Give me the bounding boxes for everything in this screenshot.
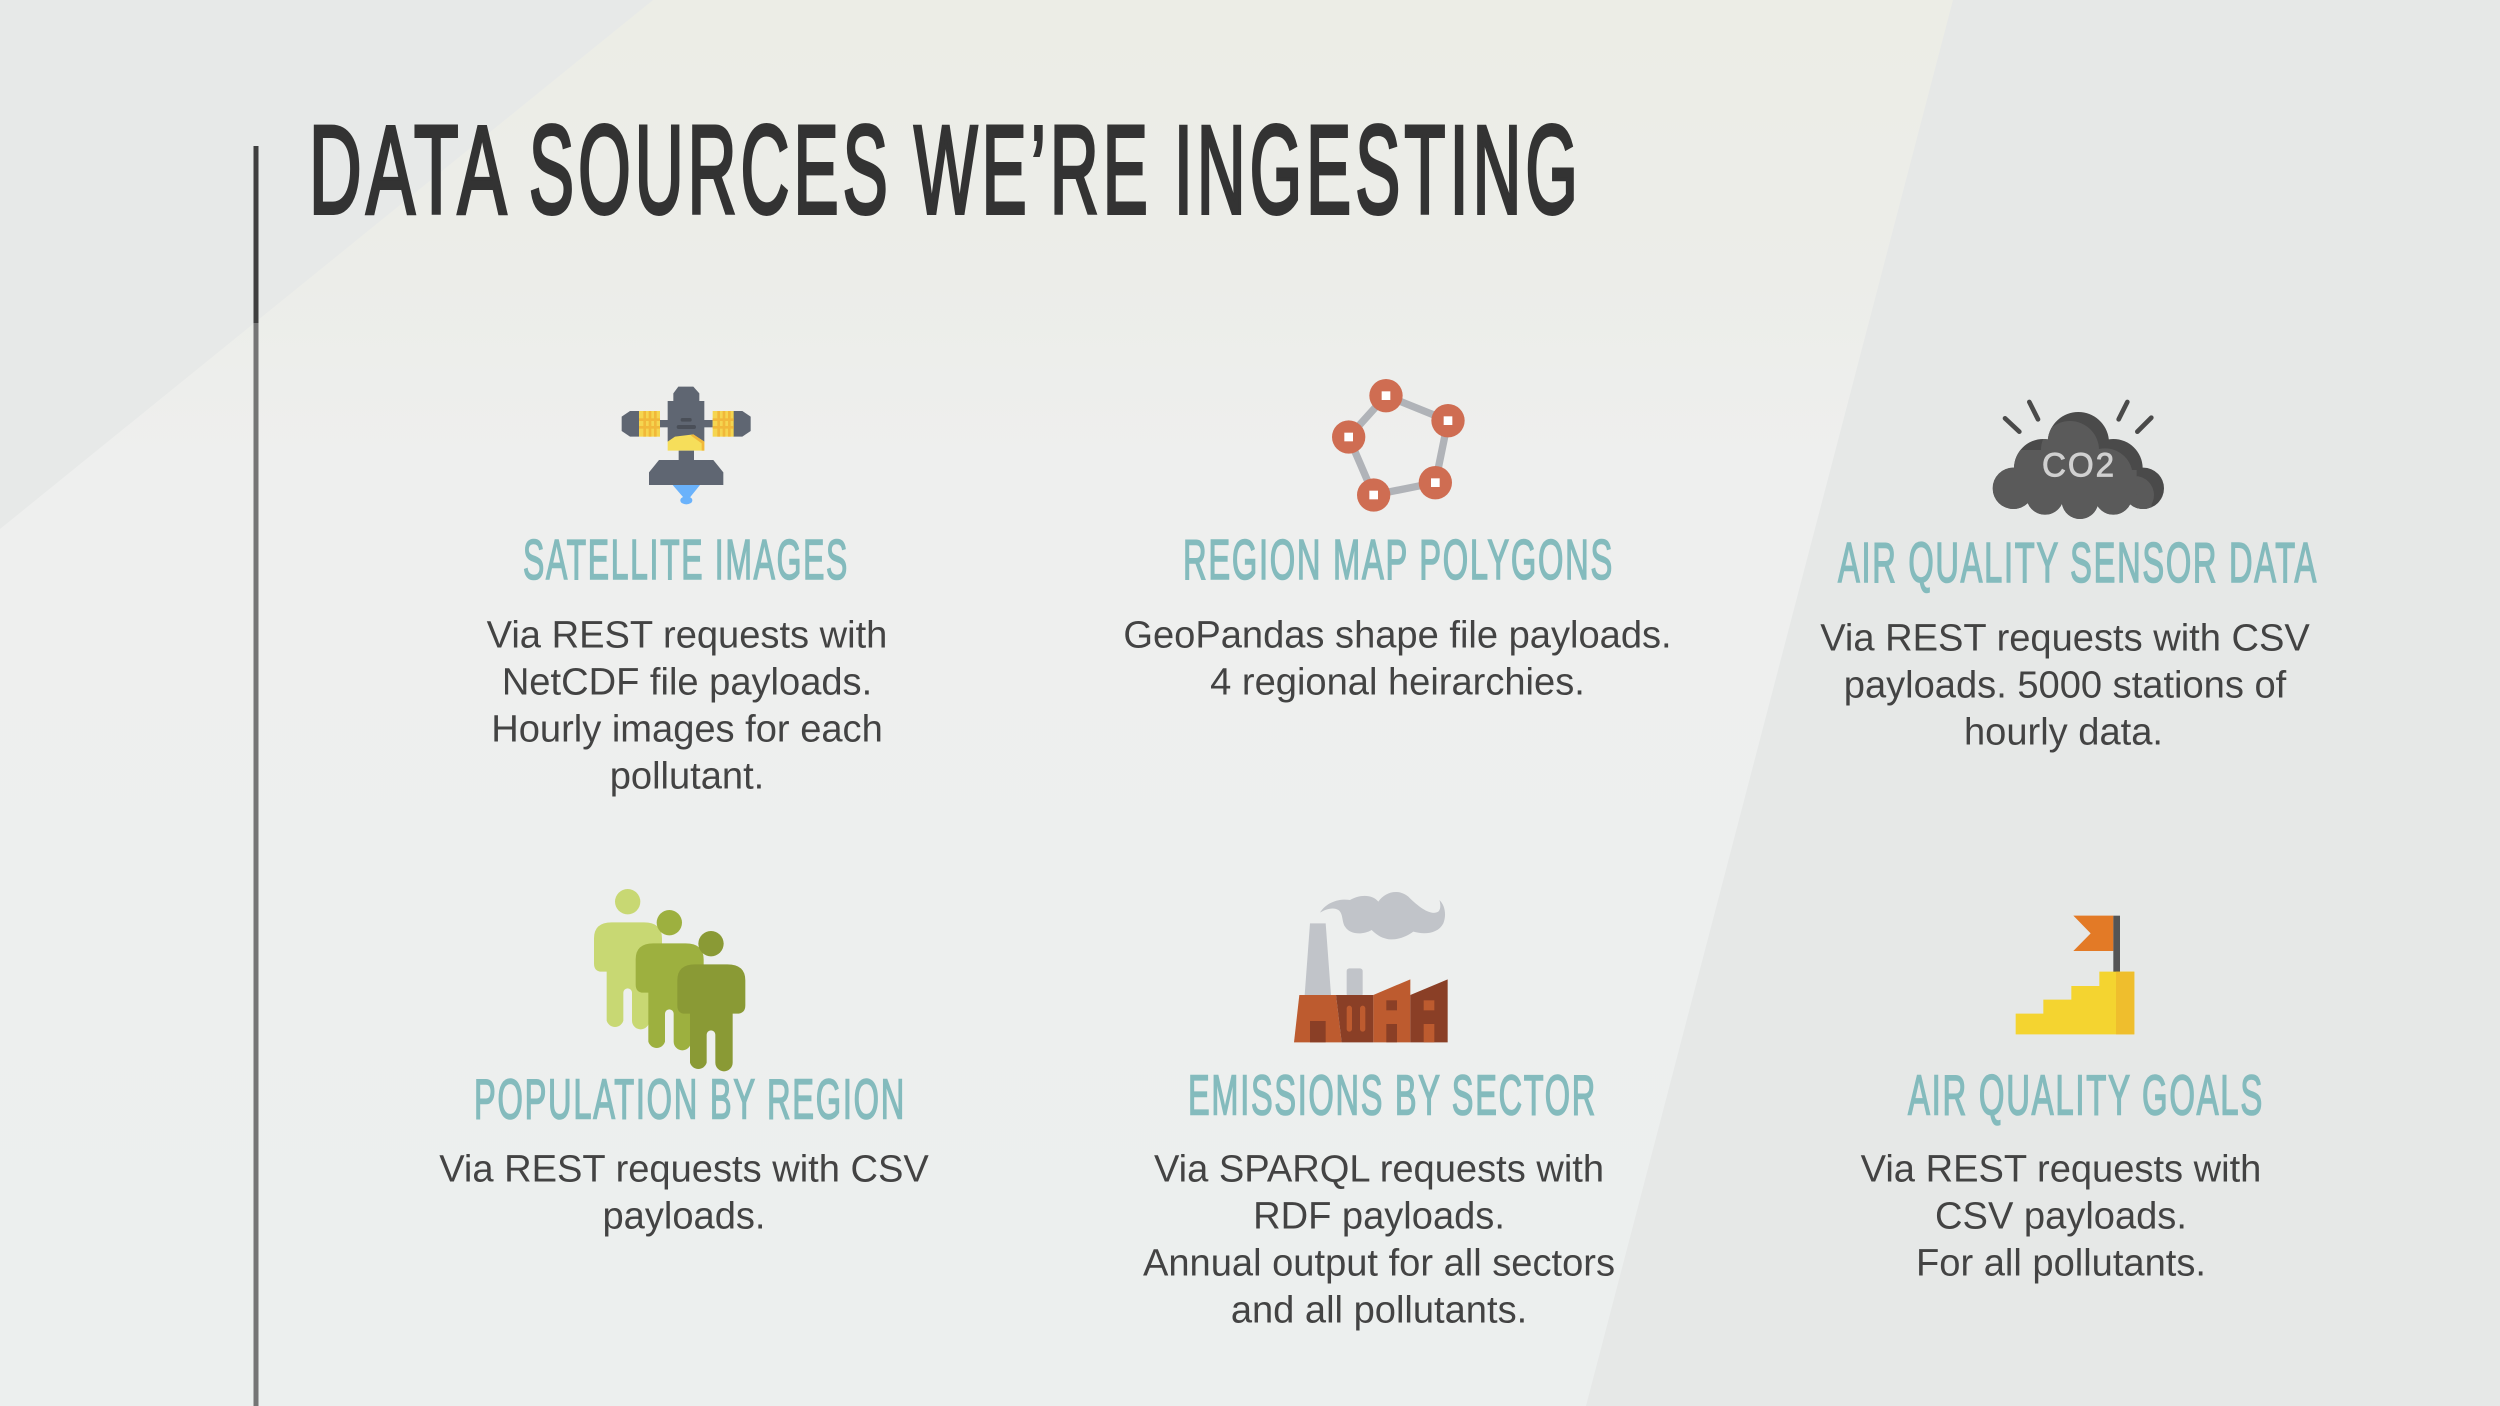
panel: population by region bbox=[439, 889, 929, 1238]
text: emissions description: and all pollutants. bbox=[1231, 1290, 1527, 1332]
heading: emissions by sector: EMISSIONS BY SECTOR bbox=[1188, 1064, 1597, 1128]
heading: region map polygons: REGION MAP POLYGONS bbox=[1183, 528, 1614, 592]
text: satellite images description: NetCDF file payloads. bbox=[502, 662, 872, 704]
text: satellite images description: Hourly images for each bbox=[491, 708, 883, 750]
title: WE’RE bbox=[914, 101, 1152, 240]
title: INGESTING bbox=[1174, 101, 1582, 240]
text: goals description: For all pollutants. bbox=[1916, 1242, 2206, 1284]
panel: emissions by sector bbox=[1143, 892, 1615, 1332]
text: emissions description: Via SPARQL requests with bbox=[1154, 1148, 1604, 1190]
text: sensor data description: payloads. 5000 stations of bbox=[1844, 664, 2287, 706]
text: goals description: Via REST requests with bbox=[1861, 1148, 2261, 1190]
title: DATA bbox=[309, 101, 507, 240]
panel: region map polygons bbox=[1123, 379, 1672, 704]
title: SOURCES bbox=[529, 101, 892, 240]
icon: three people bbox=[594, 889, 745, 1071]
heading: population by region: POPULATION BY REGION bbox=[474, 1068, 906, 1132]
text: goals description bbox=[1861, 1148, 2261, 1284]
text: population description: Via REST requests with CSV bbox=[439, 1148, 929, 1190]
icon: satellite bbox=[622, 387, 751, 504]
vertical accent line bbox=[254, 146, 258, 1406]
panel: satellite images bbox=[487, 387, 887, 798]
text: emissions description: Annual output for all sectors bbox=[1143, 1242, 1615, 1284]
text: emissions description bbox=[1143, 1148, 1615, 1332]
panel: air quality goals bbox=[1861, 916, 2264, 1284]
icon: flag on stairs bbox=[2016, 916, 2134, 1034]
text: region map description: 4 regional heirarchies. bbox=[1210, 662, 1585, 704]
text: goals description: CSV payloads. bbox=[1935, 1196, 2187, 1238]
text: sensor data description: hourly data. bbox=[1964, 712, 2163, 754]
text: sensor data description: Via REST requests with CSV bbox=[1820, 618, 2310, 660]
icon: CO2 cloud bbox=[1990, 402, 2167, 522]
text: sensor data description bbox=[1820, 618, 2310, 754]
text: emissions description: RDF payloads. bbox=[1253, 1196, 1505, 1238]
text: satellite images description bbox=[487, 614, 887, 798]
text: region map description bbox=[1123, 614, 1672, 704]
icon: factory bbox=[1294, 892, 1448, 1042]
text: population description: payloads. bbox=[602, 1196, 766, 1238]
panel: air quality sensor data bbox=[1820, 402, 2318, 754]
text: satellite images description: Via REST requests with bbox=[487, 614, 887, 656]
icon: CO2 cloud: CO2 bbox=[2042, 447, 2116, 485]
heading: satellite images: SATELLITE IMAGES bbox=[523, 528, 849, 592]
text: region map description: GeoPandas shape file payloads. bbox=[1123, 614, 1672, 656]
text: population description bbox=[439, 1148, 929, 1238]
icon: polygon network bbox=[1332, 379, 1465, 512]
text: satellite images description: pollutant. bbox=[610, 756, 764, 798]
